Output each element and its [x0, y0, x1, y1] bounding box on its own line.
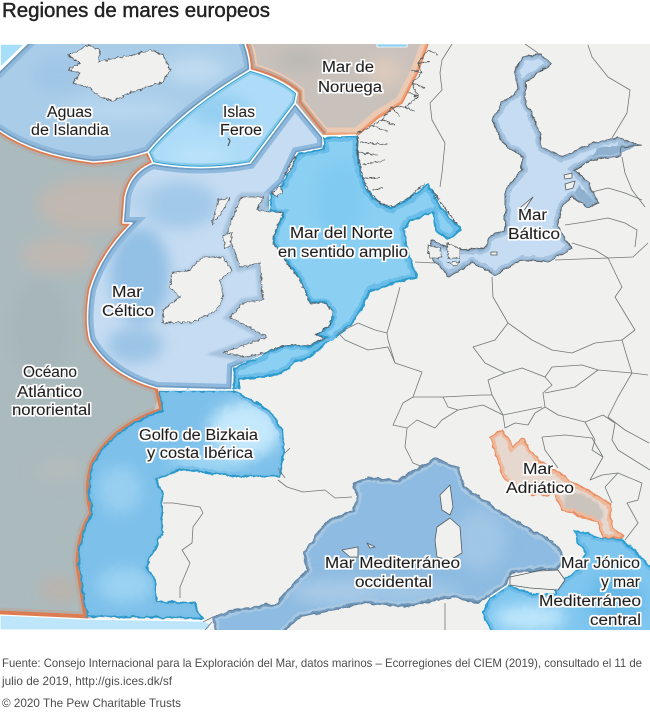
icon: Faroe islets — [228, 138, 230, 146]
panel: Waters of Iceland — [0, 30, 250, 162]
panel: Bay of Biscay and Iberian Coast — [78, 390, 285, 619]
label: Mar del Norte — [278, 225, 408, 261]
panel: Celtic Seas — [88, 103, 332, 390]
label: Golfo de Bizkaia y costa Ibérica — [139, 427, 258, 462]
icon: Danish islands — [428, 243, 460, 266]
divider: Biscay top edge — [158, 389, 233, 391]
land background — [91, 44, 650, 630]
map labels — [12, 59, 641, 629]
icon: Baltic islands — [491, 173, 575, 255]
label: Mar Adriático — [506, 461, 574, 497]
label: Aguas de Islandia — [31, 104, 109, 139]
label: Aguas de Islandia: Aguas — [47, 104, 92, 121]
panel: Greater North Sea — [223, 135, 462, 390]
label: Aguas de Islandia: de Islandia — [31, 122, 109, 139]
label: Mar Mediterráneo occidental: occidental — [355, 574, 432, 591]
label: Océano Atlántico nororiental: nororiental — [12, 402, 91, 419]
country borders — [163, 44, 650, 630]
source note: julio de 2019, http://gis.ices.dk/sf — [1, 674, 173, 688]
label: Mar Céltico — [102, 284, 154, 320]
label: Mar Jónico y mar Mediterráneo central: Mediterráneo — [539, 593, 641, 610]
orange boundary of the Atlantic — [0, 131, 162, 617]
land: islands and coasts — [68, 45, 575, 590]
icon: corner of Greenland waters — [0, 44, 25, 68]
label: Islas Feroe: Islas — [223, 104, 255, 121]
label: Mar Jónico y mar Mediterráneo central: central — [590, 612, 641, 629]
panel: Ionian Sea and Central Mediterranean — [482, 530, 650, 640]
panel: Faroe Islands — [148, 70, 297, 168]
label: Islas Feroe: Feroe — [220, 122, 262, 139]
label: Mar Adriático: Adriático — [506, 480, 574, 497]
label: Mar Céltico: Mar — [112, 284, 142, 301]
icon: Sardinia — [435, 518, 462, 560]
label: Mar de Noruega: Mar de — [322, 59, 374, 76]
label: Mar Jónico y mar Mediterráneo central: y mar — [601, 574, 640, 591]
label: Mar Jónico y mar Mediterráneo central — [539, 555, 641, 629]
label: Mar Báltico: Báltico — [508, 226, 560, 243]
label: Mar Báltico: Mar — [518, 207, 547, 224]
copyright: © 2020 The Pew Charitable Trusts — [2, 696, 181, 710]
panel: Norwegian Sea — [246, 44, 429, 136]
icon: Scottish islands — [212, 156, 296, 248]
source note — [1, 656, 642, 688]
label: Golfo de Bizkaia y costa Ibérica: y costa Ibérica — [147, 445, 253, 462]
label: Mar Báltico — [508, 207, 560, 243]
label: Mar Céltico: Céltico — [102, 303, 154, 320]
icon: Corsica — [440, 485, 453, 515]
label: Océano Atlántico nororiental: Océano — [23, 364, 77, 381]
label: Mar de Noruega — [318, 59, 382, 96]
panel: Western Mediterranean — [213, 458, 565, 640]
icon: Norwegian coast — [357, 50, 458, 225]
label: Mar de Noruega: Noruega — [318, 79, 382, 96]
label: Océano Atlántico nororiental: Atlántico — [17, 384, 82, 401]
divider: North Sea top edge — [323, 135, 358, 136]
panel: Southern Atlantic strip — [0, 615, 212, 630]
icon: Iceland — [68, 45, 170, 101]
icon: small blue area at top edge — [377, 44, 407, 47]
label: Mar del Norte: Mar del Norte — [290, 225, 393, 242]
label: Mar Mediterráneo occidental: Mar Mediterráneo — [325, 555, 460, 572]
panel: Adriatic Sea — [490, 430, 623, 538]
icon: Great Britain — [223, 197, 332, 357]
divider: Sicily channel — [490, 585, 508, 597]
icon: Ireland — [163, 257, 232, 323]
label: Islas Feroe — [220, 104, 262, 139]
label: Mar Adriático: Mar — [523, 461, 553, 478]
label: Mar Jónico y mar Mediterráneo central: Mar Jónico — [561, 555, 640, 572]
label: Mar Mediterráneo occidental — [325, 555, 460, 591]
icon: Sicily — [510, 570, 565, 590]
panel: Atlantic ocean — [0, 44, 323, 618]
icon: Balearic Islands — [342, 543, 375, 557]
label: Océano Atlántico nororiental — [12, 364, 91, 419]
label: Mar del Norte: en sentido amplio — [278, 244, 408, 261]
panel: Baltic Sea — [428, 53, 642, 277]
label: Golfo de Bizkaia y costa Ibérica: Golfo de Bizkaia — [139, 427, 258, 444]
